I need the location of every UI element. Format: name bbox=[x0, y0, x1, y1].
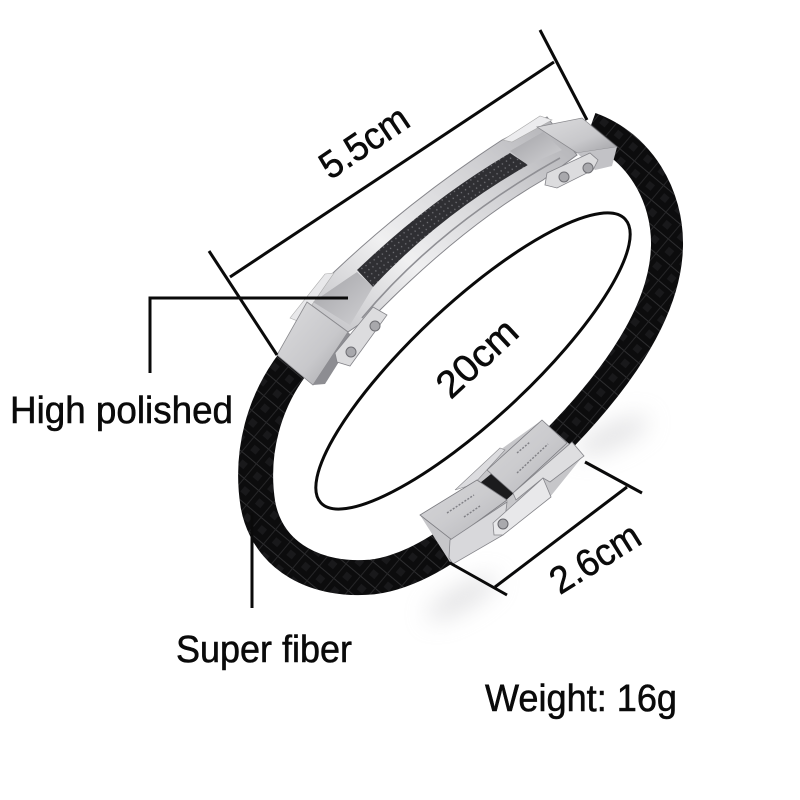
right cap side bbox=[577, 147, 617, 170]
brushed end left bbox=[313, 272, 373, 325]
clasp guide bbox=[455, 448, 505, 490]
clasp bbox=[420, 420, 584, 564]
left link bbox=[335, 307, 387, 366]
clasp inner dark gap bbox=[480, 470, 516, 503]
back tab right bbox=[503, 116, 552, 142]
label 2.6cm: 2.6cm bbox=[542, 515, 649, 603]
dimension: bar length 5.5cm bbox=[209, 30, 587, 355]
label 20cm: 20cm bbox=[428, 311, 527, 407]
weight note: Weight: 16g bbox=[485, 678, 677, 720]
lower rail shading bbox=[362, 158, 560, 318]
label: High polished bbox=[10, 390, 233, 432]
leader line bbox=[150, 298, 348, 373]
label: Super fiber bbox=[176, 629, 352, 671]
carbon fibre inlay bbox=[357, 153, 528, 287]
leader line bbox=[250, 513, 254, 608]
brushed end right bbox=[510, 132, 562, 165]
left cap bbox=[277, 302, 348, 385]
soft shadows under the clasp bbox=[422, 409, 653, 628]
clasp link bbox=[493, 478, 551, 535]
callout: high polished bbox=[10, 298, 348, 432]
metal plate bbox=[277, 116, 617, 385]
clasp strip upper bbox=[513, 442, 584, 500]
dimension: clasp length 2.6cm bbox=[450, 462, 649, 603]
ellipse bbox=[281, 177, 665, 545]
engraving left block bbox=[447, 495, 480, 517]
clasp rivet bbox=[498, 519, 508, 529]
clasp strip lower bbox=[449, 502, 507, 564]
rivets bbox=[346, 163, 593, 357]
right cap bbox=[537, 118, 617, 153]
engraving right block bbox=[517, 442, 548, 473]
dimension: circumference 20cm bbox=[281, 177, 665, 545]
left cap side bbox=[313, 332, 354, 385]
bracelet bbox=[256, 116, 667, 578]
label 5.5cm: 5.5cm bbox=[312, 98, 417, 188]
right link bbox=[545, 153, 598, 188]
clasp block right bbox=[487, 420, 567, 493]
back tab left bbox=[290, 273, 334, 322]
plate body bbox=[307, 117, 577, 332]
leather band: left side bbox=[256, 355, 462, 578]
leather band: right side bbox=[552, 128, 667, 446]
clasp block left bbox=[420, 480, 507, 540]
clasp base bbox=[420, 420, 583, 562]
dimension lines bbox=[209, 30, 587, 355]
dimension lines bbox=[450, 462, 642, 595]
